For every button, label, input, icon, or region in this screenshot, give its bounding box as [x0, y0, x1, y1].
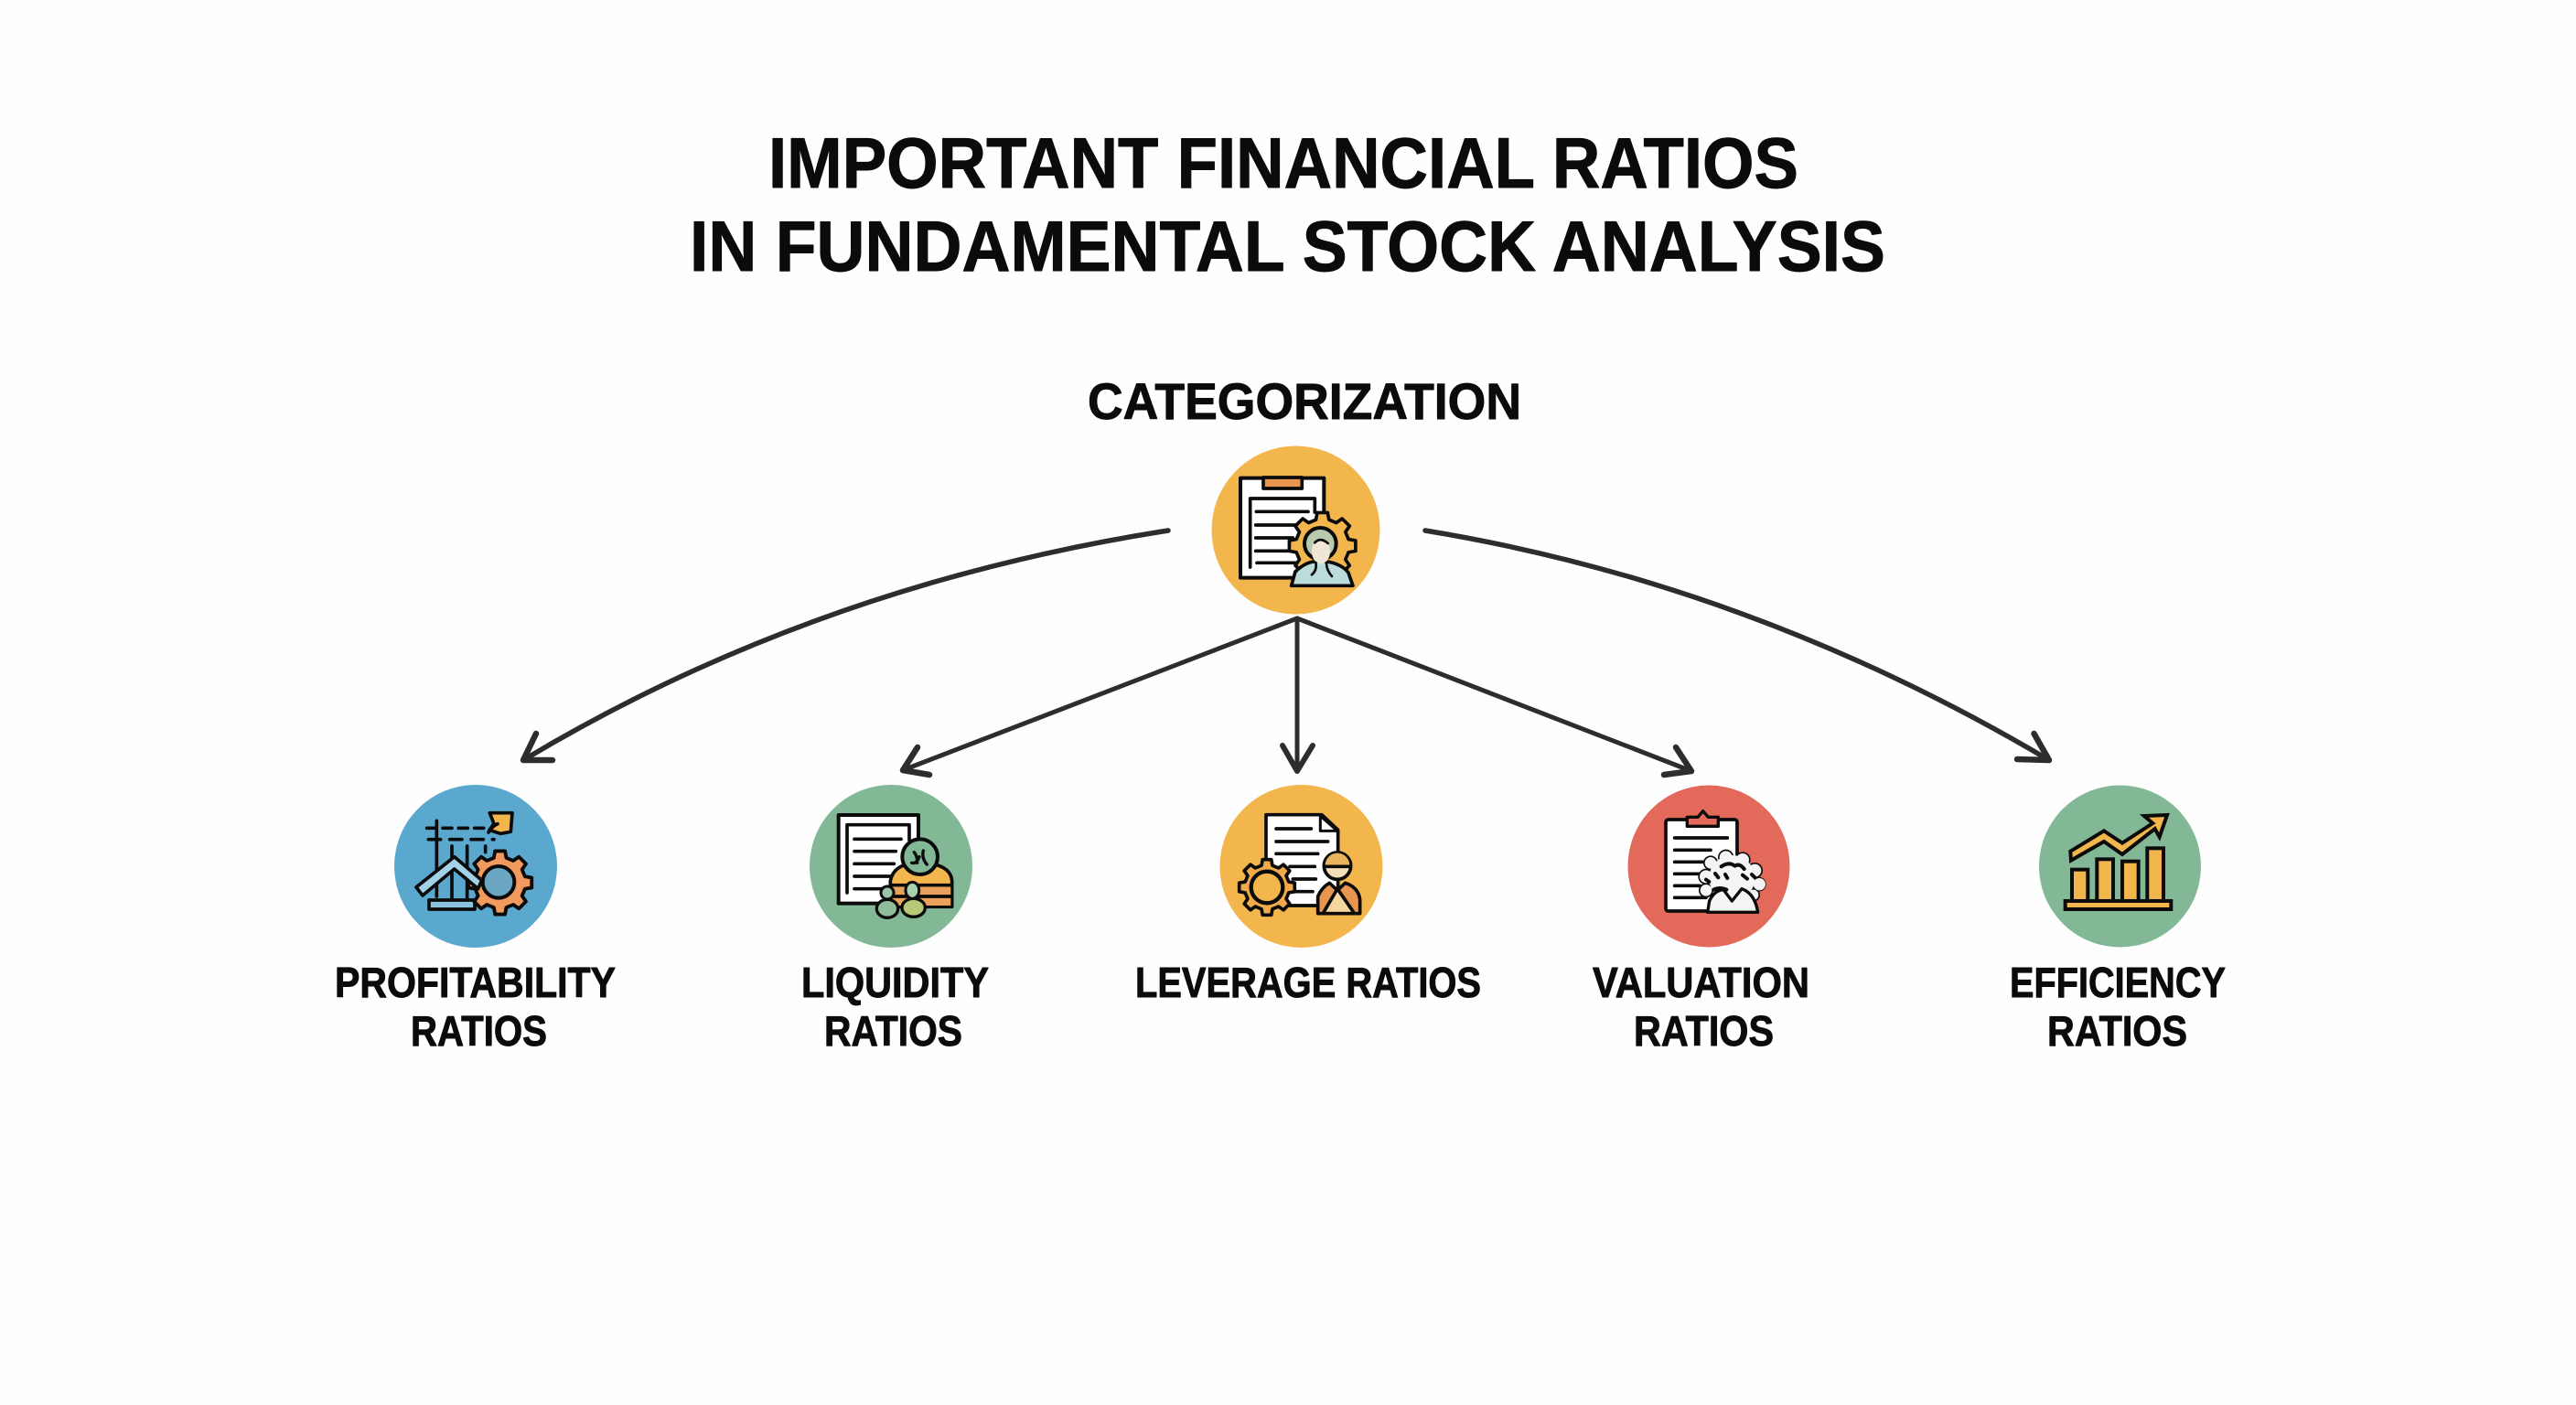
label: profitability ratios: PROFITABILITY — [335, 959, 616, 1006]
label: valuation ratios: RATIOS — [1634, 1007, 1774, 1055]
panel: efficiency ratios — [2010, 785, 2226, 1055]
icon: efficiency bar chart with rising arrow — [2039, 785, 2201, 948]
title — [690, 123, 1885, 286]
label: efficiency ratios — [2010, 959, 2226, 1055]
icon: leverage document, gear and worker — [1220, 785, 1383, 948]
arrow: to profitability ratios — [523, 531, 1168, 760]
label: liquidity ratios: RATIOS — [824, 1007, 962, 1055]
heading: categorization: CATEGORIZATION — [1088, 372, 1521, 430]
arrow: to valuation ratios — [1297, 618, 1691, 775]
panel: profitability ratios — [335, 785, 616, 1055]
title: IN FUNDAMENTAL STOCK ANALYSIS — [690, 206, 1885, 286]
arrow: to leverage ratios — [1283, 618, 1313, 771]
label: liquidity ratios: LIQUIDITY — [801, 959, 989, 1006]
panel: liquidity ratios — [801, 785, 989, 1055]
panel: leverage ratios — [1135, 785, 1481, 1006]
icon: categorization clipboard with gear and person — [1211, 446, 1379, 615]
label: efficiency ratios: EFFICIENCY — [2010, 959, 2226, 1006]
arrow: to liquidity ratios — [903, 618, 1297, 775]
arrow: to efficiency ratios — [1425, 531, 2049, 760]
icon: liquidity document, coin stack and people — [810, 785, 972, 948]
icon: profitability house, gear and arrow — [394, 785, 557, 948]
label: valuation ratios — [1593, 959, 1809, 1055]
label: efficiency ratios: RATIOS — [2047, 1007, 2187, 1055]
panel: valuation ratios — [1593, 785, 1809, 1055]
label: liquidity ratios — [801, 959, 989, 1055]
icon: valuation clipboard and person — [1628, 785, 1789, 948]
label: valuation ratios: VALUATION — [1593, 959, 1809, 1006]
title: IMPORTANT FINANCIAL RATIOS — [768, 123, 1798, 203]
label: profitability ratios: RATIOS — [411, 1007, 547, 1055]
label: leverage ratios: LEVERAGE RATIOS — [1135, 959, 1481, 1006]
label: profitability ratios — [335, 959, 616, 1055]
